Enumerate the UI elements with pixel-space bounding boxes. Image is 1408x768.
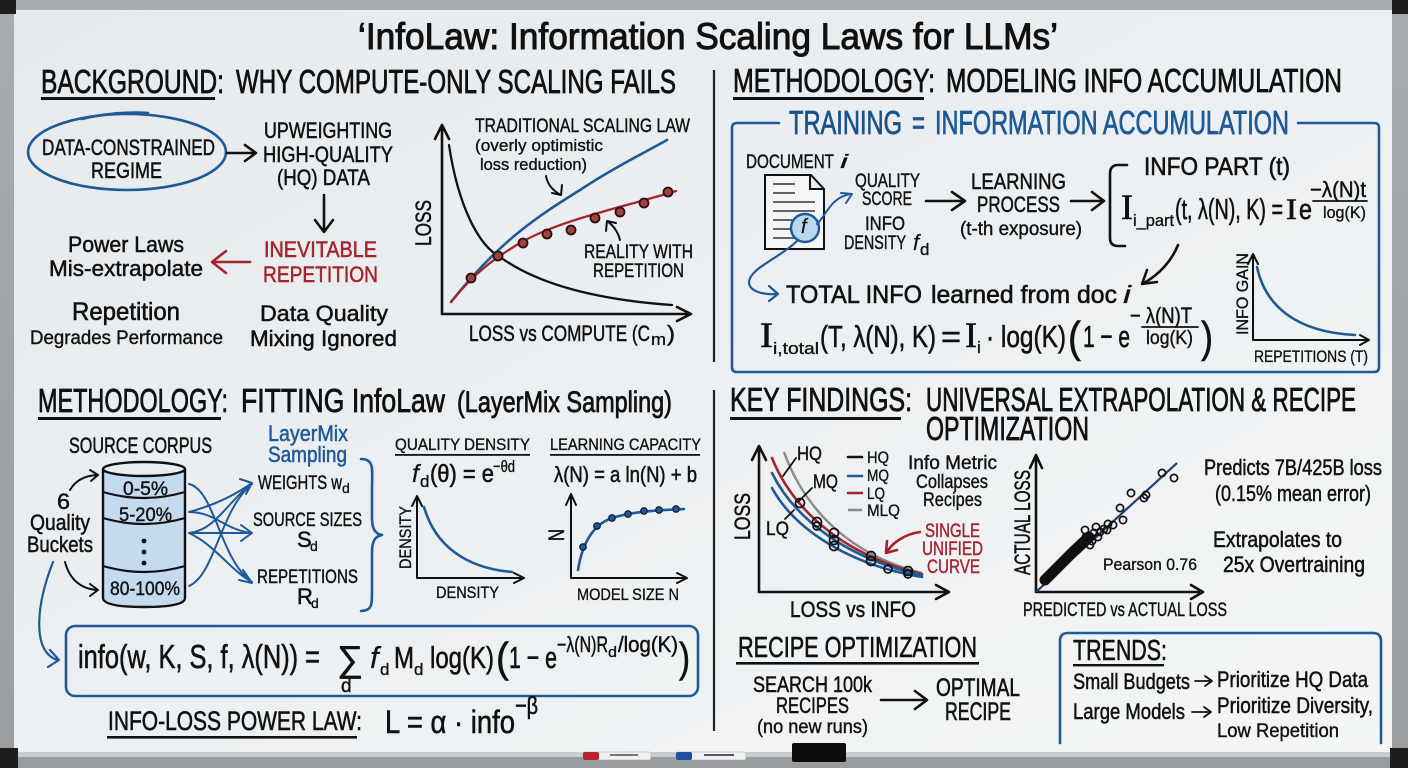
text: quality score and info density: f xyxy=(913,230,922,255)
formula: info part: I xyxy=(1286,193,1297,226)
text: large models trend xyxy=(1073,693,1373,742)
heading: training equals information accumulation xyxy=(789,104,1289,141)
heading: fitting infolaw xyxy=(38,382,672,420)
chart: loss vs compute: loss reduction) xyxy=(480,155,587,174)
icon: eraser xyxy=(792,743,846,762)
text: layermix sampling xyxy=(268,421,348,467)
text: repetition degrades performance: Degrades Performance xyxy=(30,328,223,349)
text: total info learned: learned from doc xyxy=(931,281,1117,309)
text: search 100k recipes xyxy=(753,672,873,738)
chart: predicted vs actual loss xyxy=(1010,455,1227,621)
text: quality score and info density: d xyxy=(920,240,929,259)
arrows: bucket mixing xyxy=(189,479,252,586)
formula: info part: e xyxy=(1299,194,1312,226)
formula: total info: i xyxy=(977,338,981,357)
text: extrapolates overtraining: 25x Overtraining xyxy=(1223,552,1365,577)
text: upweighting high-quality data: (HQ) DATA xyxy=(277,165,370,190)
text: layermix sampling: LayerMix xyxy=(268,421,348,446)
chart: loss vs compute: REPETITION xyxy=(593,261,684,282)
callout: single unified curve xyxy=(886,521,983,578)
heading: recipe optimization: RECIPE OPTIMIZATION xyxy=(738,632,977,664)
quality density: DENSITY xyxy=(436,583,499,602)
text: search 100k recipes: SEARCH 100k xyxy=(753,672,873,697)
text: source corpus: SOURCE CORPUS xyxy=(69,433,212,458)
quality density: (θ) = e xyxy=(430,460,494,488)
formula box: info: −λ(N)R xyxy=(557,632,608,657)
quality density xyxy=(395,435,530,602)
formula box: info: log(K) xyxy=(430,640,494,675)
formula: info part: (t, λ(N), K) = xyxy=(1175,194,1283,226)
marker tray items xyxy=(583,743,846,762)
chart: loss vs compute: ) xyxy=(667,321,675,346)
text: info-loss power law: −β xyxy=(515,692,538,720)
text: small budgets trend: Small Budgets xyxy=(1073,669,1190,694)
icon: red marker xyxy=(583,752,651,760)
text: sampling parameters: S xyxy=(297,527,312,552)
heading: trends: TRENDS: xyxy=(1073,635,1167,667)
arrow: document to total info xyxy=(749,241,797,301)
text: sampling parameters: d xyxy=(310,538,318,554)
quality density: QUALITY DENSITY xyxy=(395,435,530,454)
arrow: search to optimal xyxy=(881,691,927,709)
formula: total info: = xyxy=(941,319,961,354)
chart: predicted vs actual loss: Pearson 0.76 xyxy=(1103,555,1197,574)
heading: key findings xyxy=(730,381,1356,447)
text: power laws mis-extrapolate xyxy=(49,232,203,281)
icon: database cylinder: 5-20% xyxy=(119,505,172,526)
text: upweighting high-quality data: HIGH-QUALITY xyxy=(263,142,393,167)
formula: info part: log(K) xyxy=(1323,203,1366,222)
heading: key findings: KEY FINDINGS: xyxy=(730,381,912,418)
text: upweighting high-quality data: UPWEIGHTING xyxy=(264,118,392,143)
text: large models trend: Low Repetition xyxy=(1217,721,1339,742)
formula box: info xyxy=(66,626,698,697)
icon: database cylinder xyxy=(103,462,185,607)
text: optimal recipe: OPTIMAL xyxy=(936,674,1020,702)
text: repetition degrades performance: Repetition xyxy=(72,298,180,326)
heading: fitting infolaw: (LayerMix Sampling) xyxy=(457,386,672,419)
text: sampling parameters: REPETITIONS xyxy=(257,567,358,588)
text: info metric collapses recipes: Info Metric xyxy=(908,453,997,474)
callout: single unified curve: SINGLE xyxy=(925,521,980,542)
text: learning process: LEARNING xyxy=(971,169,1066,194)
formula: total info: log(K) xyxy=(1146,328,1193,349)
formula box: info: d xyxy=(380,660,389,679)
formula box: info: ∑ xyxy=(337,638,363,679)
formula box: info: d xyxy=(341,676,352,697)
heading: fitting infolaw: FITTING InfoLaw xyxy=(241,382,445,419)
oval: data-constrained regime: DATA-CONSTRAINED xyxy=(42,135,215,160)
chart: loss vs compute: m xyxy=(651,330,666,349)
formula: total info: − λ(N)T xyxy=(1130,303,1192,328)
text: predicts loss: (0.15% mean error) xyxy=(1215,481,1371,506)
formula: total info: I xyxy=(760,315,773,355)
formula: info part: i_part xyxy=(1133,211,1174,230)
text: sampling parameters: WEIGHTS w xyxy=(258,473,342,494)
box outline: training xyxy=(732,123,1379,372)
chart: loss vs compute: LOSS vs COMPUTE (C xyxy=(469,321,650,346)
box: trends xyxy=(1060,633,1381,743)
heading: background: BACKGROUND: xyxy=(41,63,224,100)
formula box: info: d xyxy=(608,644,617,661)
text: large models trend: Large Models xyxy=(1073,699,1185,724)
panel: methodology info accumulation xyxy=(732,62,1379,372)
chart: info gain vs repetitions xyxy=(1233,253,1369,366)
learning capacity: LEARNING CAPACITY xyxy=(550,435,701,454)
text: total info learned: i xyxy=(1123,281,1133,309)
arrow: learning to info part xyxy=(1071,192,1104,210)
formula box: info: ) xyxy=(679,634,690,681)
quality density: −θd xyxy=(493,457,515,476)
legend: data quality lines: HQ xyxy=(867,448,889,467)
learning capacity: MODEL SIZE N xyxy=(577,585,679,604)
heading: background: WHY COMPUTE-ONLY SCALING FAILS xyxy=(236,63,676,100)
icon: document: f xyxy=(801,216,809,238)
text: power laws mis-extrapolate: Power Laws xyxy=(68,232,184,257)
learning capacity: λ(N) = a ln(N) + b xyxy=(554,462,697,487)
oval: data-constrained regime xyxy=(28,113,226,190)
chart: info gain vs repetitions: INFO GAIN xyxy=(1233,253,1252,335)
arrow: score to learning xyxy=(926,192,965,210)
text: sampling parameters: R xyxy=(297,584,313,609)
text: total info learned: TOTAL INFO xyxy=(786,281,922,309)
formula box: info: 1 − e xyxy=(509,640,557,675)
text: power laws mis-extrapolate: Mis-extrapolate xyxy=(49,256,203,281)
panel: key findings xyxy=(730,381,1382,743)
chart: loss vs info: HQ xyxy=(797,444,822,465)
panel: background xyxy=(28,63,693,351)
text: inevitable repetition xyxy=(263,237,378,287)
text: small budgets trend xyxy=(1073,667,1369,694)
formula: info part: −λ(N)t xyxy=(1310,177,1366,202)
label: document i: DOCUMENT xyxy=(746,152,834,173)
text: search 100k recipes: RECIPES xyxy=(776,693,849,718)
brace: parameters xyxy=(361,459,382,611)
label: document i: i xyxy=(840,152,849,173)
text: info part t: INFO PART (t) xyxy=(1144,153,1290,181)
icon: blue marker xyxy=(676,752,746,760)
icon: database cylinder: 0-5% xyxy=(123,479,168,500)
text: inevitable repetition: REPETITION xyxy=(263,262,378,287)
text: sampling parameters: d xyxy=(311,595,319,611)
icon: database cylinder: 80-100% xyxy=(110,579,180,600)
divider: vertical top xyxy=(713,70,715,362)
chart: info gain vs repetitions: REPETITIONS (T) xyxy=(1254,347,1368,366)
arrow: document to quality score xyxy=(817,193,852,224)
formula: total info: 1 − e xyxy=(1083,319,1130,354)
text: info-loss power law: INFO-LOSS POWER LAW: xyxy=(108,706,362,736)
text: sampling parameters: d xyxy=(342,480,350,496)
formula: total info: ) xyxy=(1201,313,1213,362)
chart: loss vs compute xyxy=(411,116,693,349)
text: 6 quality buckets: Buckets xyxy=(27,532,93,557)
chart: loss vs info: LOSS vs INFO xyxy=(790,597,916,622)
text: layermix sampling: Sampling xyxy=(268,442,347,467)
text: learning process xyxy=(960,169,1082,240)
formula: total info: I xyxy=(965,315,977,355)
text: data quality mixing ignored: Data Quality xyxy=(260,301,388,326)
divider: vertical bottom xyxy=(713,390,715,731)
oval: data-constrained regime: REGIME xyxy=(91,158,162,183)
text: 6 quality buckets xyxy=(27,489,93,557)
heading: modeling info accumulation: METHODOLOGY: xyxy=(733,62,935,99)
callout: single unified curve: UNIFIED xyxy=(922,539,983,560)
text: repetition degrades performance xyxy=(30,298,223,349)
text: info metric collapses recipes: Collapses xyxy=(916,472,988,493)
formula box: info: /log(K) xyxy=(618,632,678,657)
icon: document xyxy=(765,175,824,249)
panel: methodology fitting infolaw xyxy=(27,382,701,740)
formula box: info: ( xyxy=(496,634,509,681)
text: quality score and info density xyxy=(844,171,929,259)
quality density: f xyxy=(412,460,422,488)
quality density: DENSITY xyxy=(396,506,415,569)
text: extrapolates overtraining xyxy=(1213,527,1365,577)
chart: loss vs info: LOSS xyxy=(730,493,755,540)
callout: single unified curve: CURVE xyxy=(927,557,980,578)
chart: loss vs info xyxy=(730,444,949,622)
arrows: buckets to cylinder xyxy=(65,470,98,596)
text: info metric collapses recipes xyxy=(908,453,997,511)
formula: total info xyxy=(760,303,1213,362)
heading: modeling info accumulation xyxy=(733,62,1342,100)
text: predicts loss xyxy=(1204,455,1382,506)
legend: data quality lines: LQ xyxy=(867,484,885,503)
formula: total info: i,total xyxy=(773,339,819,358)
formula box: info: f xyxy=(370,640,382,675)
learning capacity xyxy=(544,435,701,604)
chart: loss vs info: LQ xyxy=(766,519,789,540)
chart: predicted vs actual loss: PREDICTED vs ACTUAL LOSS xyxy=(1023,600,1227,621)
text: info-loss power law xyxy=(107,692,538,740)
text: extrapolates overtraining: Extrapolates to xyxy=(1213,527,1342,552)
arrow: info part to total info xyxy=(1142,245,1178,284)
arrow: down to repetition xyxy=(315,195,333,232)
formula box: info: d xyxy=(414,660,423,679)
text: learning process: (t-th exposure) xyxy=(960,219,1082,240)
text: optimal recipe: RECIPE xyxy=(945,698,1011,726)
formula: info part: I xyxy=(1121,187,1133,227)
text: learning process: PROCESS xyxy=(977,192,1060,217)
text: sampling parameters: SOURCE SIZES xyxy=(253,510,362,531)
formula: total info: (T, λ(N), K) xyxy=(820,319,936,354)
heading: training equals information accumulation: = xyxy=(912,104,925,141)
text: info-loss power law: L = α · info xyxy=(385,704,515,740)
title: ‘InfoLaw: Information Scaling Laws for LLMs’ xyxy=(358,16,1058,57)
text: 6 quality buckets: 6 xyxy=(57,489,70,514)
text: large models trend: Prioritize Diversity, xyxy=(1217,693,1373,718)
quality density: d xyxy=(420,472,429,491)
arrow: regime to upweighting xyxy=(227,145,256,161)
heading: background xyxy=(41,63,676,100)
bracket: info part xyxy=(1110,165,1127,246)
text: quality score and info density: QUALITY xyxy=(855,171,920,192)
legend: data quality lines: MQ xyxy=(867,466,889,485)
formula: info part xyxy=(1121,177,1367,230)
heading: fitting infolaw: METHODOLOGY: xyxy=(38,382,228,419)
formula: total info: · log(K) xyxy=(986,319,1066,354)
arrow: repetition to power laws xyxy=(212,251,250,273)
text: 6 quality buckets: Quality xyxy=(30,510,90,535)
heading: training equals information accumulation: TRAINING xyxy=(789,104,902,141)
text: inevitable repetition: INEVITABLE xyxy=(264,237,377,262)
text: info metric collapses recipes: Recipes xyxy=(923,490,982,511)
text: data quality mixing ignored: Mixing Ignored xyxy=(250,326,397,351)
formula: total info: ( xyxy=(1068,313,1081,362)
chart: loss vs compute: TRADITIONAL SCALING LAW xyxy=(475,116,690,137)
legend: data quality lines: MLQ xyxy=(867,501,900,520)
heading: key findings: OPTIMIZATION xyxy=(926,410,1089,447)
legend: data quality lines xyxy=(848,448,900,520)
text: small budgets trend: Prioritize HQ Data xyxy=(1217,667,1369,692)
chart: loss vs compute: LOSS xyxy=(411,200,436,246)
chart: loss vs compute: (overly optimistic xyxy=(475,136,603,155)
text: quality score and info density: SCORE xyxy=(862,189,912,210)
formula box: info: M xyxy=(394,640,414,675)
formula box: info: info(w, K, S, f, λ(N)) = xyxy=(78,638,320,675)
text: data quality mixing ignored xyxy=(250,301,397,351)
chart: loss vs compute: REALITY WITH xyxy=(584,242,693,263)
text: upweighting high-quality data xyxy=(263,118,393,190)
chart: predicted vs actual loss: ACTUAL LOSS xyxy=(1010,470,1035,575)
text: sampling parameters xyxy=(253,473,362,611)
text: total info learned xyxy=(786,281,1133,309)
text: search 100k recipes: (no new runs) xyxy=(757,717,868,738)
text: optimal recipe xyxy=(936,674,1020,726)
text: quality score and info density: INFO xyxy=(865,214,905,235)
arrow: buckets to formula xyxy=(39,562,59,667)
text: quality score and info density: DENSITY xyxy=(844,233,906,254)
learning capacity: N xyxy=(544,529,569,541)
chart: loss vs info: MQ xyxy=(813,472,838,493)
